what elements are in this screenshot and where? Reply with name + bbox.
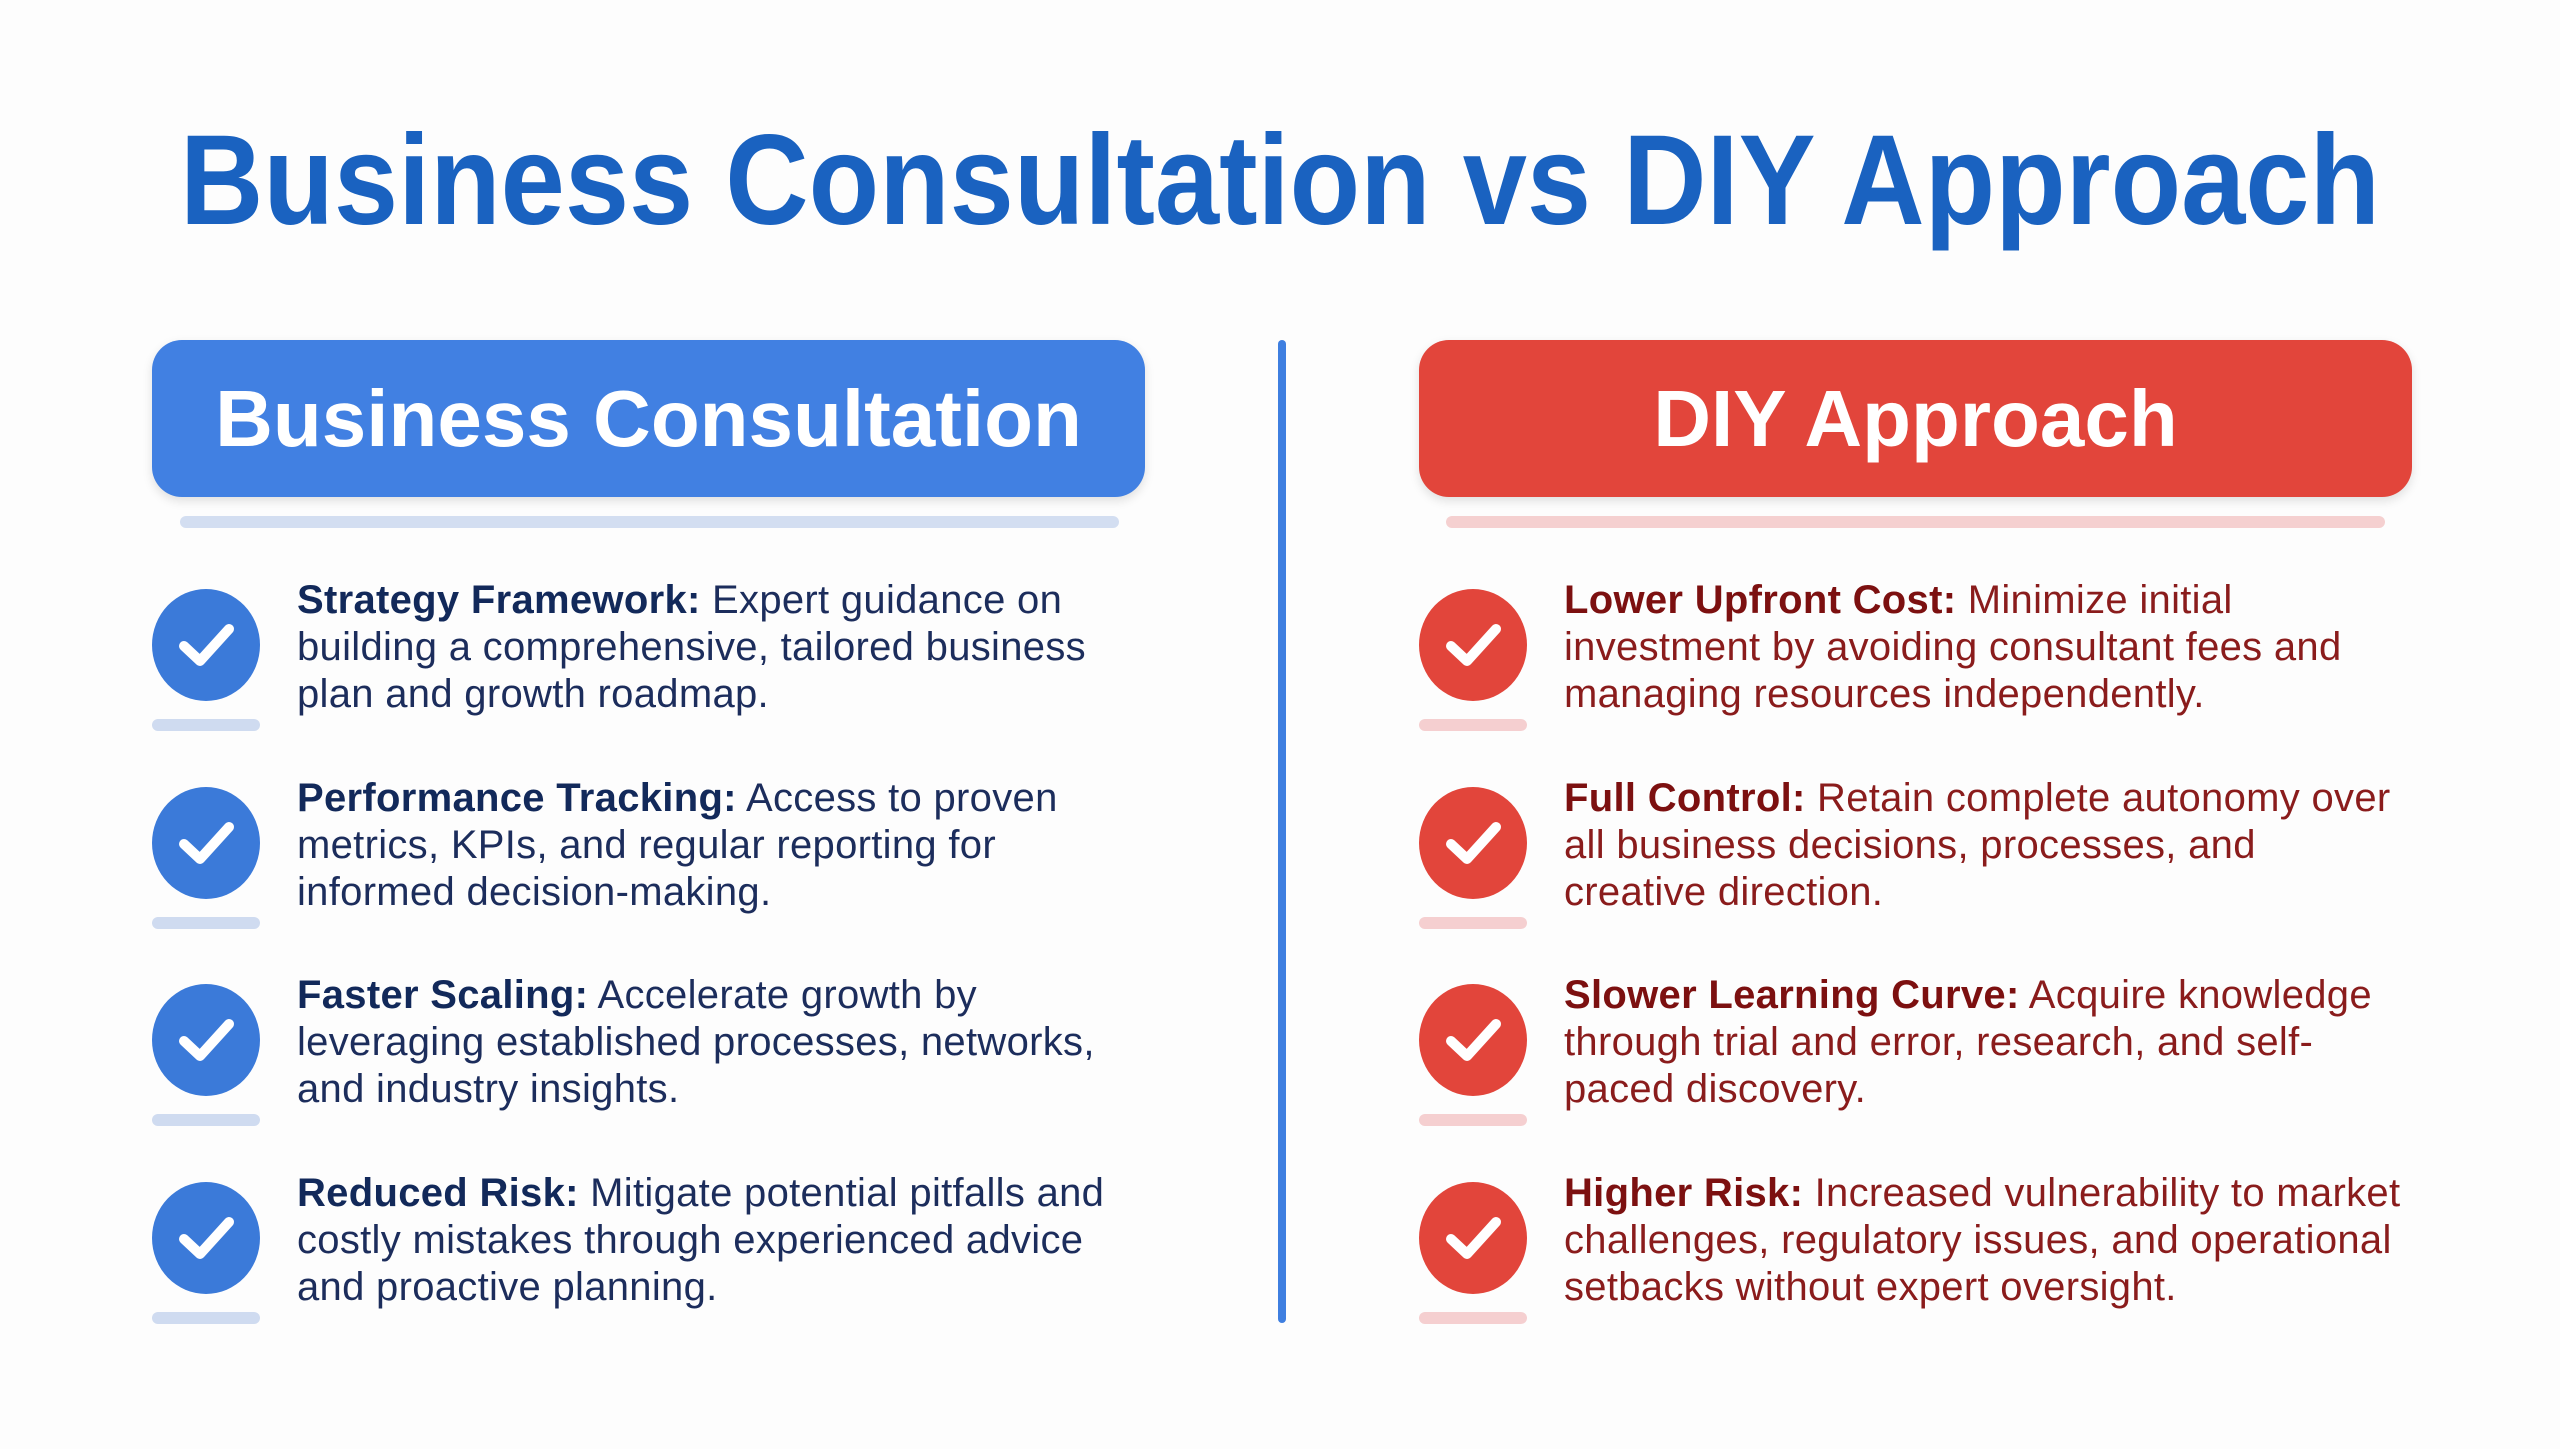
panel: business consultation list [152,578,1104,1324]
header: DIY Approach: DIY Approach [1653,374,2178,462]
item: full control: creative direction. [1564,870,1883,914]
item: higher risk: setbacks without expert oversight. [1564,1265,2177,1309]
item: reduced risk: and proactive planning. [297,1265,718,1309]
item: performance tracking: metrics, KPIs, and regular reporting for [297,823,996,867]
item: reduced risk: Reduced Risk: Mitigate potential pitfalls and [297,1171,1104,1215]
item: performance tracking: Performance Tracking: Access to proven [297,776,1058,820]
icon: red check [1419,787,1527,899]
item: lower upfront cost [1419,578,2342,731]
item: faster scaling: and industry insights. [297,1067,679,1111]
item: full control: Full Control: Retain complete autonomy over [1564,776,2390,820]
item: strategy framework: building a comprehensive, tailored business [297,625,1086,669]
icon: blue check [152,787,260,899]
item: reduced risk: costly mistakes through experienced advice [297,1218,1083,1262]
item: faster scaling: Faster Scaling: Accelerate growth by [297,973,977,1017]
icon: blue check [152,1182,260,1294]
item: higher risk [1419,1171,2400,1324]
divider [1278,340,1286,1323]
item: full control [1419,776,2390,929]
item: higher risk: Higher Risk: Increased vulnerability to market [1564,1171,2400,1215]
item: lower upfront cost: investment by avoiding consultant fees and [1564,625,2342,669]
item: slower learning curve: through trial and error, research, and self- [1564,1020,2313,1064]
item: strategy framework: Strategy Framework: Expert guidance on [297,578,1062,622]
item: lower upfront cost: managing resources independently. [1564,672,2205,716]
icon: blue check [152,589,260,701]
item: lower upfront cost: Lower Upfront Cost: Minimize initial [1564,578,2233,622]
item: slower learning curve [1419,973,2372,1126]
title: Business Consultation vs DIY Approach [180,109,2380,252]
item: slower learning curve: paced discovery. [1564,1067,1866,1111]
icon: blue check [152,984,260,1096]
item: faster scaling: leveraging established processes, networks, [297,1020,1095,1064]
item: performance tracking: informed decision-making. [297,870,771,914]
panel: DIY list [1419,578,2400,1324]
item: higher risk: challenges, regulatory issues, and operational [1564,1218,2392,1262]
item: strategy framework [152,578,1086,731]
item: strategy framework: plan and growth roadmap. [297,672,769,716]
item: full control: all business decisions, processes, and [1564,823,2256,867]
item: reduced risk [152,1171,1104,1324]
icon: red check [1419,589,1527,701]
item: performance tracking [152,776,1058,929]
header: Business Consultation [152,340,1145,497]
icon: red check [1419,1182,1527,1294]
icon: red check [1419,984,1527,1096]
header: Business Consultation: Business Consultation [215,374,1082,462]
header: DIY Approach [1419,340,2412,497]
item: faster scaling [152,973,1095,1126]
item: slower learning curve: Slower Learning Curve: Acquire knowledge [1564,973,2372,1017]
